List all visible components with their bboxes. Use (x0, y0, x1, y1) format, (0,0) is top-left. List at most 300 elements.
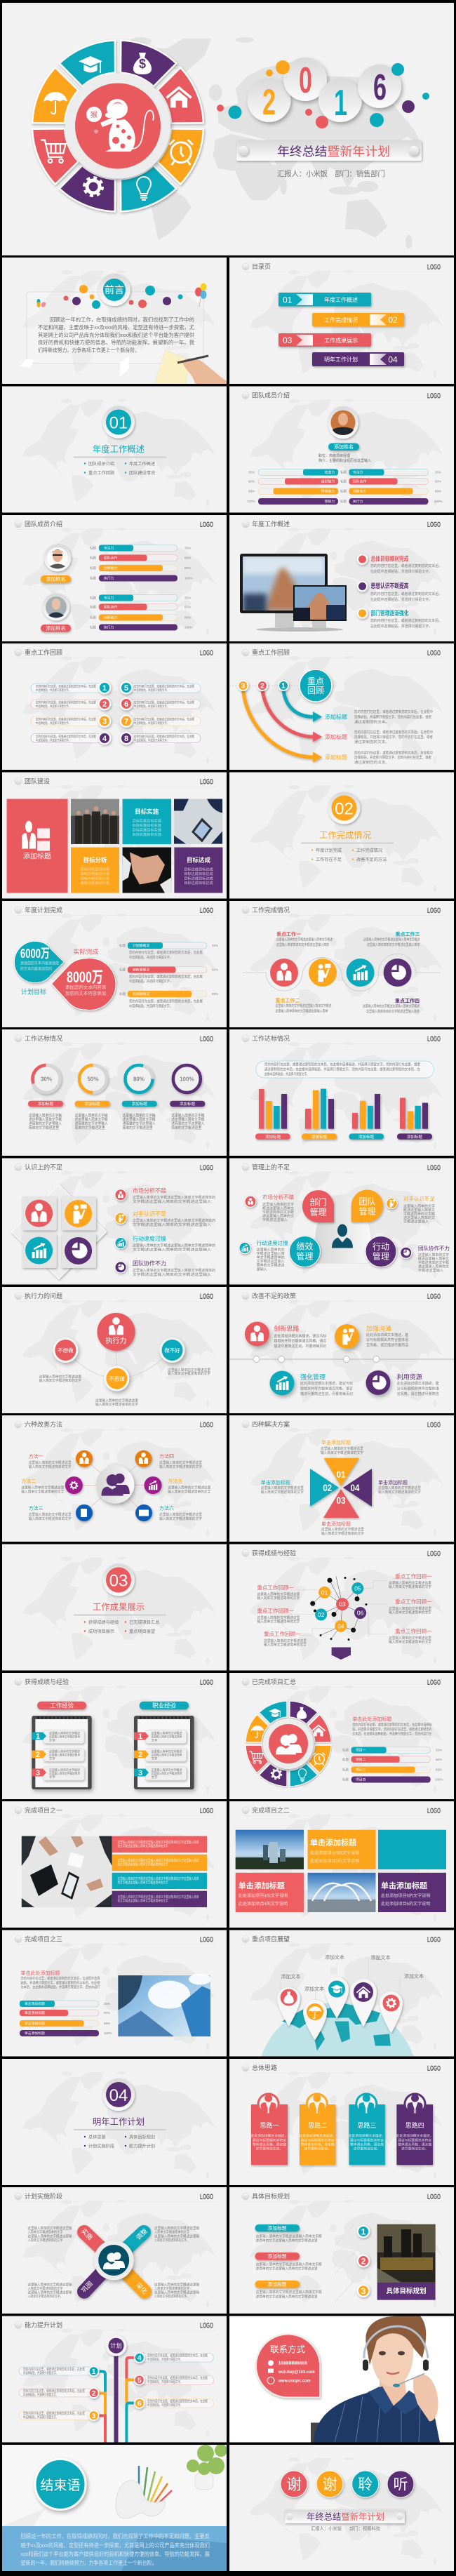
caption left one: 输入简单文字概述简单的文字 (257, 1596, 300, 1601)
item two: 您的内容打在这里，或者通过复制您的文本后， (370, 592, 442, 596)
teal circle (289, 1236, 320, 1267)
red actual drop: 加您的文本内容添加 (65, 989, 106, 996)
section bullets: 年度计划完成 (316, 848, 342, 853)
method four: 方法四 (159, 1453, 174, 1460)
arm implement (80, 2227, 114, 2260)
notebook right: 这里输入简单的文字概述 (152, 1749, 182, 1754)
preface text: 其是网上的公司产品库充分体现我们xxx和我们这个平台能为客户提供 (38, 331, 194, 338)
text key work one: 重点工作一 (276, 930, 301, 937)
goal three: 这里输入简单的文字概述这里输入简单文字概 (256, 2290, 322, 2295)
method one (29, 1453, 72, 1469)
petal 02 (310, 1469, 339, 1507)
label and text three: 您的内容打在这里，或者通过复制您的文本后，在此框中 (354, 751, 433, 755)
left skill bars: 组织能力 (321, 479, 335, 484)
timeline with nodes (229, 1356, 454, 1363)
progress bars with notes: 您的内容打在这里，或者通过复制您的文本后，在此框 (129, 999, 203, 1003)
right numbered pills: 中选择粘贴，并选择只保留文字。 (134, 688, 169, 693)
policy resources: 议与标题相关并符合整体语 (397, 1387, 439, 1391)
number badges: 06 (357, 1610, 364, 1617)
caption top: 输入简单文字概述简单的文字 (321, 1450, 363, 1455)
right number badges: 7 (124, 717, 128, 726)
stripe orange (112, 1855, 207, 1871)
stripe teal: 的文字概述这里输入简单文字概述简单的文字 (118, 1881, 168, 1885)
heading: 年度计划完成 (25, 906, 62, 914)
heading: 获得成绩与经验 (252, 1549, 296, 1556)
method six: 输入简单文字概述简单的文字 (159, 1516, 202, 1521)
card four: 建议与标题相关并符合 (398, 2137, 431, 2142)
key review badge (300, 669, 332, 702)
contents item 04 (312, 352, 404, 366)
right numbered pills: 中选择粘贴，并选择只保留文字。 (134, 738, 169, 742)
left skill bars: 标题 (340, 488, 347, 494)
policy innovate: 创新思路 (274, 1325, 299, 1332)
left numbered pills: 您的内容打在这里，或者通过复制您的文本后，在此框 (36, 683, 96, 689)
logo: LOGO (200, 778, 213, 786)
circle badly done (160, 1337, 185, 1363)
shortfall one: 市场分析不踏 (133, 1187, 166, 1194)
ring 30 percent: 30% (41, 1076, 52, 1082)
world map (250, 2457, 443, 2565)
large monitor (240, 554, 343, 632)
item two: 在此框中选择粘贴，并选择只保留文字。 (370, 597, 432, 602)
panel: two team members (2, 515, 227, 641)
section badge: 01 (109, 414, 128, 432)
notebook right: 这里输入简单的文字概述 (152, 1768, 182, 1773)
bars: 35% (104, 2002, 110, 2006)
note top right: 这里输入简单的文字概述这里输 (154, 2226, 199, 2231)
year balls 2016: 2 (262, 82, 276, 123)
contents item 02: 02 (388, 315, 398, 325)
purple project tile (378, 1873, 446, 1912)
pin house (350, 1979, 377, 2027)
stripe purple: 的文字概述这里输入简单文字概述简单的文字 (118, 1899, 168, 1903)
left notes: 中选择粘贴，并选择只保留文字。 (23, 2393, 58, 2397)
bars: 单击添加标题 (25, 2021, 45, 2026)
text left (39, 1374, 81, 1383)
key review badge: 重点 (307, 676, 324, 686)
name pill two (41, 625, 71, 632)
circle red person (270, 959, 298, 987)
project note: 您的内容打在这里，或者通过复制您的文本后，在此框中选择 (21, 1976, 100, 1981)
node five (145, 1476, 161, 1494)
text labels: 添加文本 (370, 1954, 390, 1961)
logo: LOGO (200, 521, 213, 529)
method five: 方法五 (168, 1478, 182, 1484)
caption left three: 重点工作回顾一 (264, 1630, 301, 1637)
captions: 述这里输入简单文字概 (29, 1116, 62, 1122)
red contact drop: wutukeji@163.com (278, 2370, 315, 2375)
left skill bars: 60% (248, 480, 255, 483)
reporter line: 汇报人：小米饭 部门：销售部门 (277, 169, 385, 178)
year balls 2016: 0 (299, 60, 312, 101)
heading: 已完成项目汇总 (252, 1678, 296, 1686)
text key work four (363, 998, 420, 1014)
text key work two: 重点工作二 (275, 997, 300, 1003)
card four: 此处添加详细文本描述， (396, 2133, 434, 2138)
contents item 03 (279, 333, 371, 347)
skill bars one: 创新能力 (104, 566, 117, 570)
captions: 述简单的文字这里输入 (171, 1121, 205, 1126)
note market: 述这里输入简单的文 (262, 1214, 294, 1218)
petal 02: 02 (323, 1482, 332, 1493)
reporter line: 部门：视图科技 (349, 2525, 381, 2532)
panel: execution problems (2, 1287, 227, 1413)
note speed: 单文字概述简单的 (257, 1255, 285, 1260)
text right (168, 1368, 210, 1376)
heading: 改善不足的政策 (252, 1292, 296, 1300)
right number badges: 6 (138, 2400, 142, 2408)
tile purple pie (62, 1234, 96, 1268)
project bars: 标题 (342, 1777, 349, 1782)
captions (29, 1113, 205, 1130)
icon: umbrella (43, 92, 67, 114)
orange goal block: 目标分析 (83, 856, 107, 863)
centre backdrop (315, 1194, 371, 1263)
notebook right: 文字 (152, 1775, 158, 1780)
name pill (328, 443, 359, 451)
note top right: 入简单文字概述简单的文字 (154, 2230, 189, 2234)
skill bars one (90, 545, 193, 581)
icon: gear (84, 178, 102, 196)
progress bars with notes (119, 942, 218, 1009)
label pills: 添加标题 (38, 1101, 53, 1107)
centre hub (94, 2241, 134, 2280)
closing badge: 结束语 (40, 2478, 81, 2493)
skill bars one: 标题 (90, 556, 96, 560)
progress bars with notes: 35% (212, 944, 218, 947)
heading (15, 778, 50, 785)
panel: section 02 (229, 772, 454, 898)
captions: 述简单的文字这里输入 (123, 1121, 156, 1126)
red actual drop: 8000万 (67, 968, 103, 986)
panel: section 04 (2, 2059, 227, 2185)
pin gear (380, 1991, 403, 2034)
left number badges: 3 (92, 2412, 96, 2420)
contents item 03: 03 (283, 335, 293, 345)
right numbered pills: 您的内容打在这里，或者通过复制您的文本后，在此框 (134, 683, 194, 689)
left skill bars: 标题 (340, 499, 347, 504)
policy innovate: 此处添加详细文本描述，建议与标 (274, 1333, 326, 1339)
title banner (236, 140, 422, 161)
left number badges: 2 (92, 2389, 96, 2398)
notebook right: 2 (138, 1751, 142, 1759)
teal target drop (14, 942, 64, 982)
section badge (102, 1563, 135, 1596)
notebook right: 这里输入简单文字概述简单 (152, 1771, 182, 1776)
world map (250, 1814, 443, 1921)
left numbered pills: 您的内容打在这里，或者通过复制您的文本后，在此框 (36, 700, 96, 705)
heading: 团队成员介绍 (252, 392, 290, 399)
section badge: 03 (109, 1572, 128, 1590)
policy management: 描述尽量简洁生动，尽量将每页幻 (300, 1392, 353, 1396)
node one (76, 1450, 93, 1467)
teal goal block: 目标实施目标实施 (133, 818, 161, 824)
item one: 您的内容打在这里，或者通过复制您的文本后， (370, 563, 442, 568)
panel: section 03 (2, 1544, 227, 1670)
thanks circles: 谢 (286, 2477, 302, 2492)
label and text two: 选择粘贴，并选择只保留文字。您的内容打在这里，或者 (354, 735, 433, 740)
project description: 贴，并选择只保留文字。您的内容打在这里，或者通过复制您的 (352, 1727, 431, 1732)
name pill two: 添加姓名 (46, 625, 66, 632)
world map (250, 1556, 443, 1664)
chart label pills: 添加标题 (265, 1134, 281, 1140)
card two: 思路二 (308, 2121, 327, 2129)
progress bars with notes: 60% (212, 968, 218, 972)
method one: 这里输入简单的文字概述这里 (29, 1460, 72, 1465)
red actual drop: 添加您的文本内容添 (65, 984, 107, 990)
chart label pills: 添加标题 (407, 1134, 422, 1140)
method two (21, 1478, 64, 1495)
text bottom: 输入简单文字概述简单的文字 (95, 1402, 138, 1407)
numbered nodes: 1 (281, 682, 286, 690)
notebook right: 文字 (152, 1756, 158, 1761)
text key work one: 这里输入简单简单的文字概述这里输入简单 (276, 942, 329, 947)
chart label pills: 添加标题 (311, 1134, 327, 1140)
panel: annual plan completion (2, 901, 227, 1027)
method two: 输入简单文字概述简单的文字 (21, 1489, 64, 1495)
skill bars two: 标题 (90, 605, 96, 609)
method two: 方法二 (21, 1478, 36, 1484)
bars (20, 2001, 112, 2036)
note top left (28, 2226, 72, 2243)
caption left three (264, 1630, 307, 1648)
central plan stem: 计划 (111, 2342, 122, 2349)
section bullets: 工作存在不足 (316, 857, 342, 862)
stripe orange: 的文字概述这里输入简单文字概述简单的文字 (118, 1862, 168, 1867)
blue text band: 映于xx及xxx的风格、定型还有待进一步探索，尤其是网上的公司产品库充分体现我们 (21, 2542, 210, 2549)
policy resources (366, 1370, 439, 1396)
heading: 获得成绩与经验 (25, 1678, 69, 1686)
notebook left: 1 (36, 1733, 40, 1741)
arm deepen (114, 2260, 149, 2295)
caption left two: 重点工作回顾一 (257, 1607, 294, 1614)
plant (187, 2444, 227, 2490)
captions: 述简单的文字这里输入 (75, 1121, 108, 1126)
left number badges (88, 2365, 100, 2421)
logo: LOGO (200, 1035, 213, 1043)
note oval: 此框中选择粘贴，并选择只保留文字。 (264, 1072, 309, 1076)
right number badges (134, 2352, 145, 2409)
stripe purple: 这里输入简单的文字概述这里输入简单文字概述简单的文字这里输入简单 (118, 1895, 199, 1900)
card one: 思路一 (260, 2121, 279, 2129)
progress bars with notes: 89% (212, 992, 218, 996)
world map (250, 1942, 443, 2050)
heading: 年度工作概述 (252, 520, 290, 528)
shortfall three: 这里输入简单的文字概述这里输入简单文字概述简单的 (133, 1243, 215, 1248)
project bars: 项目四 (356, 1778, 366, 1782)
icon: light bulb (137, 177, 151, 200)
progress bars with notes: 标题 (119, 943, 126, 948)
label and text three: 添加标题 (325, 754, 347, 761)
thanks circles: 听 (393, 2477, 408, 2492)
left skill bars: 标题 (340, 470, 347, 474)
wave connector (243, 954, 441, 991)
left numbered pills: 您的内容打在这里，或者通过复制您的文本后，在此框 (36, 734, 96, 739)
year balls 2016: 1 (334, 83, 347, 124)
skill bars one: 60% (185, 556, 191, 560)
captions: 述简单的文字这里输入 (29, 1121, 62, 1126)
centre ring with monkey (65, 73, 170, 178)
notebook right: 3 (138, 1769, 142, 1777)
card four (396, 2093, 434, 2165)
stripe red: 这里输入简单的文字概述这里输入简单文字概述简单的文字这里输入简单 (118, 1840, 199, 1845)
caption right three: 输入简单文字概述简单的文字 (389, 1639, 431, 1645)
name pill one: 添加姓名 (46, 575, 66, 582)
section bullets: 改善不足的方法 (356, 857, 387, 862)
project note (21, 1970, 100, 1990)
note teamwork: 概述这里输入简单文 (418, 1256, 449, 1262)
world map (250, 914, 443, 1021)
logo: LOGO (427, 2064, 441, 2073)
left skill bars: 89% (248, 490, 255, 493)
pin graduation cap (325, 1977, 349, 2018)
skill bars one: 35% (185, 546, 191, 550)
icon: alarm clock (169, 140, 193, 165)
note top right: 这里输入简单的文字概述这里输 (154, 2234, 199, 2238)
icon: money bag (133, 53, 152, 74)
panel: key work review curved arrows (229, 643, 454, 770)
centre ring with monkey: 猴 (90, 110, 98, 119)
left notes: 您的内容打在这里，或者通过复制您的文本后，在此框 (23, 2411, 85, 2416)
policy communicate: 议与标题相关并符合整体语 (366, 1337, 408, 1342)
world map (250, 2071, 443, 2179)
role text: 职位：高级项目经理 (318, 453, 350, 458)
red contact drop: www.ooopic.com (278, 2379, 311, 2383)
right notes (140, 2354, 213, 2408)
panel: implementation phases (2, 2187, 227, 2314)
heading (242, 263, 271, 270)
logo: LOGO (427, 521, 441, 529)
card three: 建议与标题相关并符合 (350, 2137, 384, 2142)
method three (29, 1504, 72, 1521)
text bottom: 这里输入简单的文字概述这里 (95, 1398, 138, 1403)
shortfall one: 文字概述这里输入简单的文字概述这里输入 (133, 1199, 211, 1204)
connector arc (65, 1350, 172, 1378)
right numbered pills: 您的内容打在这里，或者通过复制您的文本后，在此框 (134, 717, 194, 721)
heading: 团队建设 (25, 778, 50, 785)
note rival (387, 1195, 435, 1224)
shortfall one (115, 1187, 215, 1204)
caption top: 这里输入简单的文字概述这里 (321, 1446, 363, 1451)
logo: LOGO (200, 2321, 213, 2330)
world map (22, 1042, 215, 1149)
note top right (154, 2226, 199, 2243)
right numbered pills: 中选择粘贴，并选择只保留文字。 (134, 721, 169, 726)
skill bars one: 100% (185, 577, 193, 580)
contents item 04: 明年工作计划 (324, 356, 358, 363)
logo: LOGO (200, 2193, 213, 2201)
number badges: 3 (361, 2286, 366, 2296)
goal one: 述简单的文字这里输入简单的文字概述这里 (256, 2238, 318, 2243)
note rival: 这里输入简单的文字 (403, 1204, 435, 1208)
title banner: 年终总结 (277, 145, 327, 159)
central plan stem (105, 2335, 126, 2442)
panel: completed project three (2, 1930, 227, 2056)
world map (22, 785, 215, 893)
caption left: 单击添加标题 (261, 1479, 290, 1486)
logo: LOGO (200, 1935, 213, 1944)
thanks circles (281, 2471, 414, 2497)
right number badges: 8 (124, 735, 128, 743)
section badge (102, 2078, 135, 2111)
captions: 这里输入简单的文字概 (75, 1113, 108, 1119)
note market: 字概述简单的文字概 (262, 1210, 294, 1215)
notebook left: 这里输入简单的文字概述 (49, 1749, 80, 1754)
arm implement: 实施 (80, 2227, 95, 2241)
heading (242, 2064, 277, 2071)
panel: targets bar chart (229, 1029, 454, 1156)
teal goal block: 目标实施目标实施 (133, 832, 161, 837)
captions: 简单的文字概述这里 (29, 1125, 60, 1130)
note oval: 您的内容打在这里，或者通过复制您的文本后，在此框中选择粘贴，并选择只保留文字。您的内容打在这里，或者 (264, 1062, 420, 1067)
progress bars with notes: 中选择粘贴，并选择只保留文字。 (129, 955, 173, 960)
goal three (255, 2281, 322, 2299)
skill bars one: 标题 (90, 566, 96, 570)
left skill bars: 35% (248, 470, 255, 474)
panel: thank you slide (229, 2445, 454, 2571)
right numbered pills: 您的内容打在这里，或者通过复制您的文本后，在此框 (134, 734, 194, 739)
skill bars two: 专注力 (104, 595, 114, 601)
diamond backdrop (11, 1184, 107, 1279)
note market (245, 1193, 294, 1222)
left skill bars: 标题 (340, 479, 347, 484)
heading: 工作达标情况 (252, 1034, 290, 1042)
heading: 团队成员介绍 (25, 520, 62, 528)
purple goal block: 目标达成目标达成 (184, 866, 213, 872)
logo: LOGO (427, 392, 441, 400)
goal caption block (377, 2283, 436, 2300)
text labels: 添加文本 (281, 1973, 300, 1980)
caption right one (389, 1573, 432, 1589)
left number badges: 1 (92, 2368, 96, 2376)
shortfall four: 这里输入简单的文字概述这里输入简单文字概述简单的 (133, 1268, 215, 1273)
note oval (256, 1061, 434, 1078)
caption right two: 这里输入简单的文字概述这里 (389, 1606, 431, 1611)
card three: 整体语言风格，语言描 (350, 2142, 384, 2147)
label and text one: 选择粘贴，并选择只保留文字。您的内容打在这里，或者 (354, 714, 431, 720)
closing banner: 暨新年计划 (341, 2511, 384, 2522)
caption left: 这里输入简单的文字概述这里 (261, 1486, 304, 1490)
caption right one: 输入简单文字概述简单的文字 (389, 1584, 431, 1589)
notebook right: 1 (138, 1733, 142, 1741)
world map (22, 1428, 215, 1535)
petal 01 (323, 1458, 359, 1486)
heading: 计划实施阶段 (25, 2192, 62, 2200)
logo: LOGO (427, 1293, 441, 1301)
method five (168, 1478, 210, 1495)
project bars: 项目一 (356, 1749, 366, 1753)
policy communicate (335, 1324, 408, 1349)
notebook left: 这里输入简单文字概述简单 (49, 1735, 80, 1739)
method three: 这里输入简单的文字概述这里 (29, 1512, 72, 1517)
right numbered pills: 中选择粘贴，并选择只保留文字。 (134, 704, 169, 709)
shortfall three: 文字概述这里输入简单的文字概述这里输入 (133, 1248, 211, 1252)
caption right one: 重点工作回顾一 (395, 1573, 432, 1580)
arm consolidate (80, 2260, 114, 2294)
orange goal block: 目标分析目标分析 (81, 871, 109, 876)
item three: 在此框中选择粘贴，并选择只保留文字。 (370, 624, 432, 629)
world map (22, 2071, 215, 2179)
left notes: 中选择粘贴，并选择只保留文字。 (23, 2370, 58, 2376)
goal one (255, 2224, 322, 2243)
photo: meeting from above (174, 799, 222, 844)
caption right three: 重点工作回顾一 (395, 1627, 432, 1634)
stripe orange: 这里输入简单的文字概述这里输入简单文字概述简单的文字这里输入简单 (118, 1858, 199, 1863)
balloons (36, 283, 206, 308)
item three: 您的内容打在这里，或者通过复制您的文本后， (370, 618, 442, 623)
notebook left: 这里输入简单的文字概述 (49, 1730, 80, 1736)
right notes: 您的内容打在这里，或者通过复制您的文本后，在此框 (147, 2398, 208, 2404)
